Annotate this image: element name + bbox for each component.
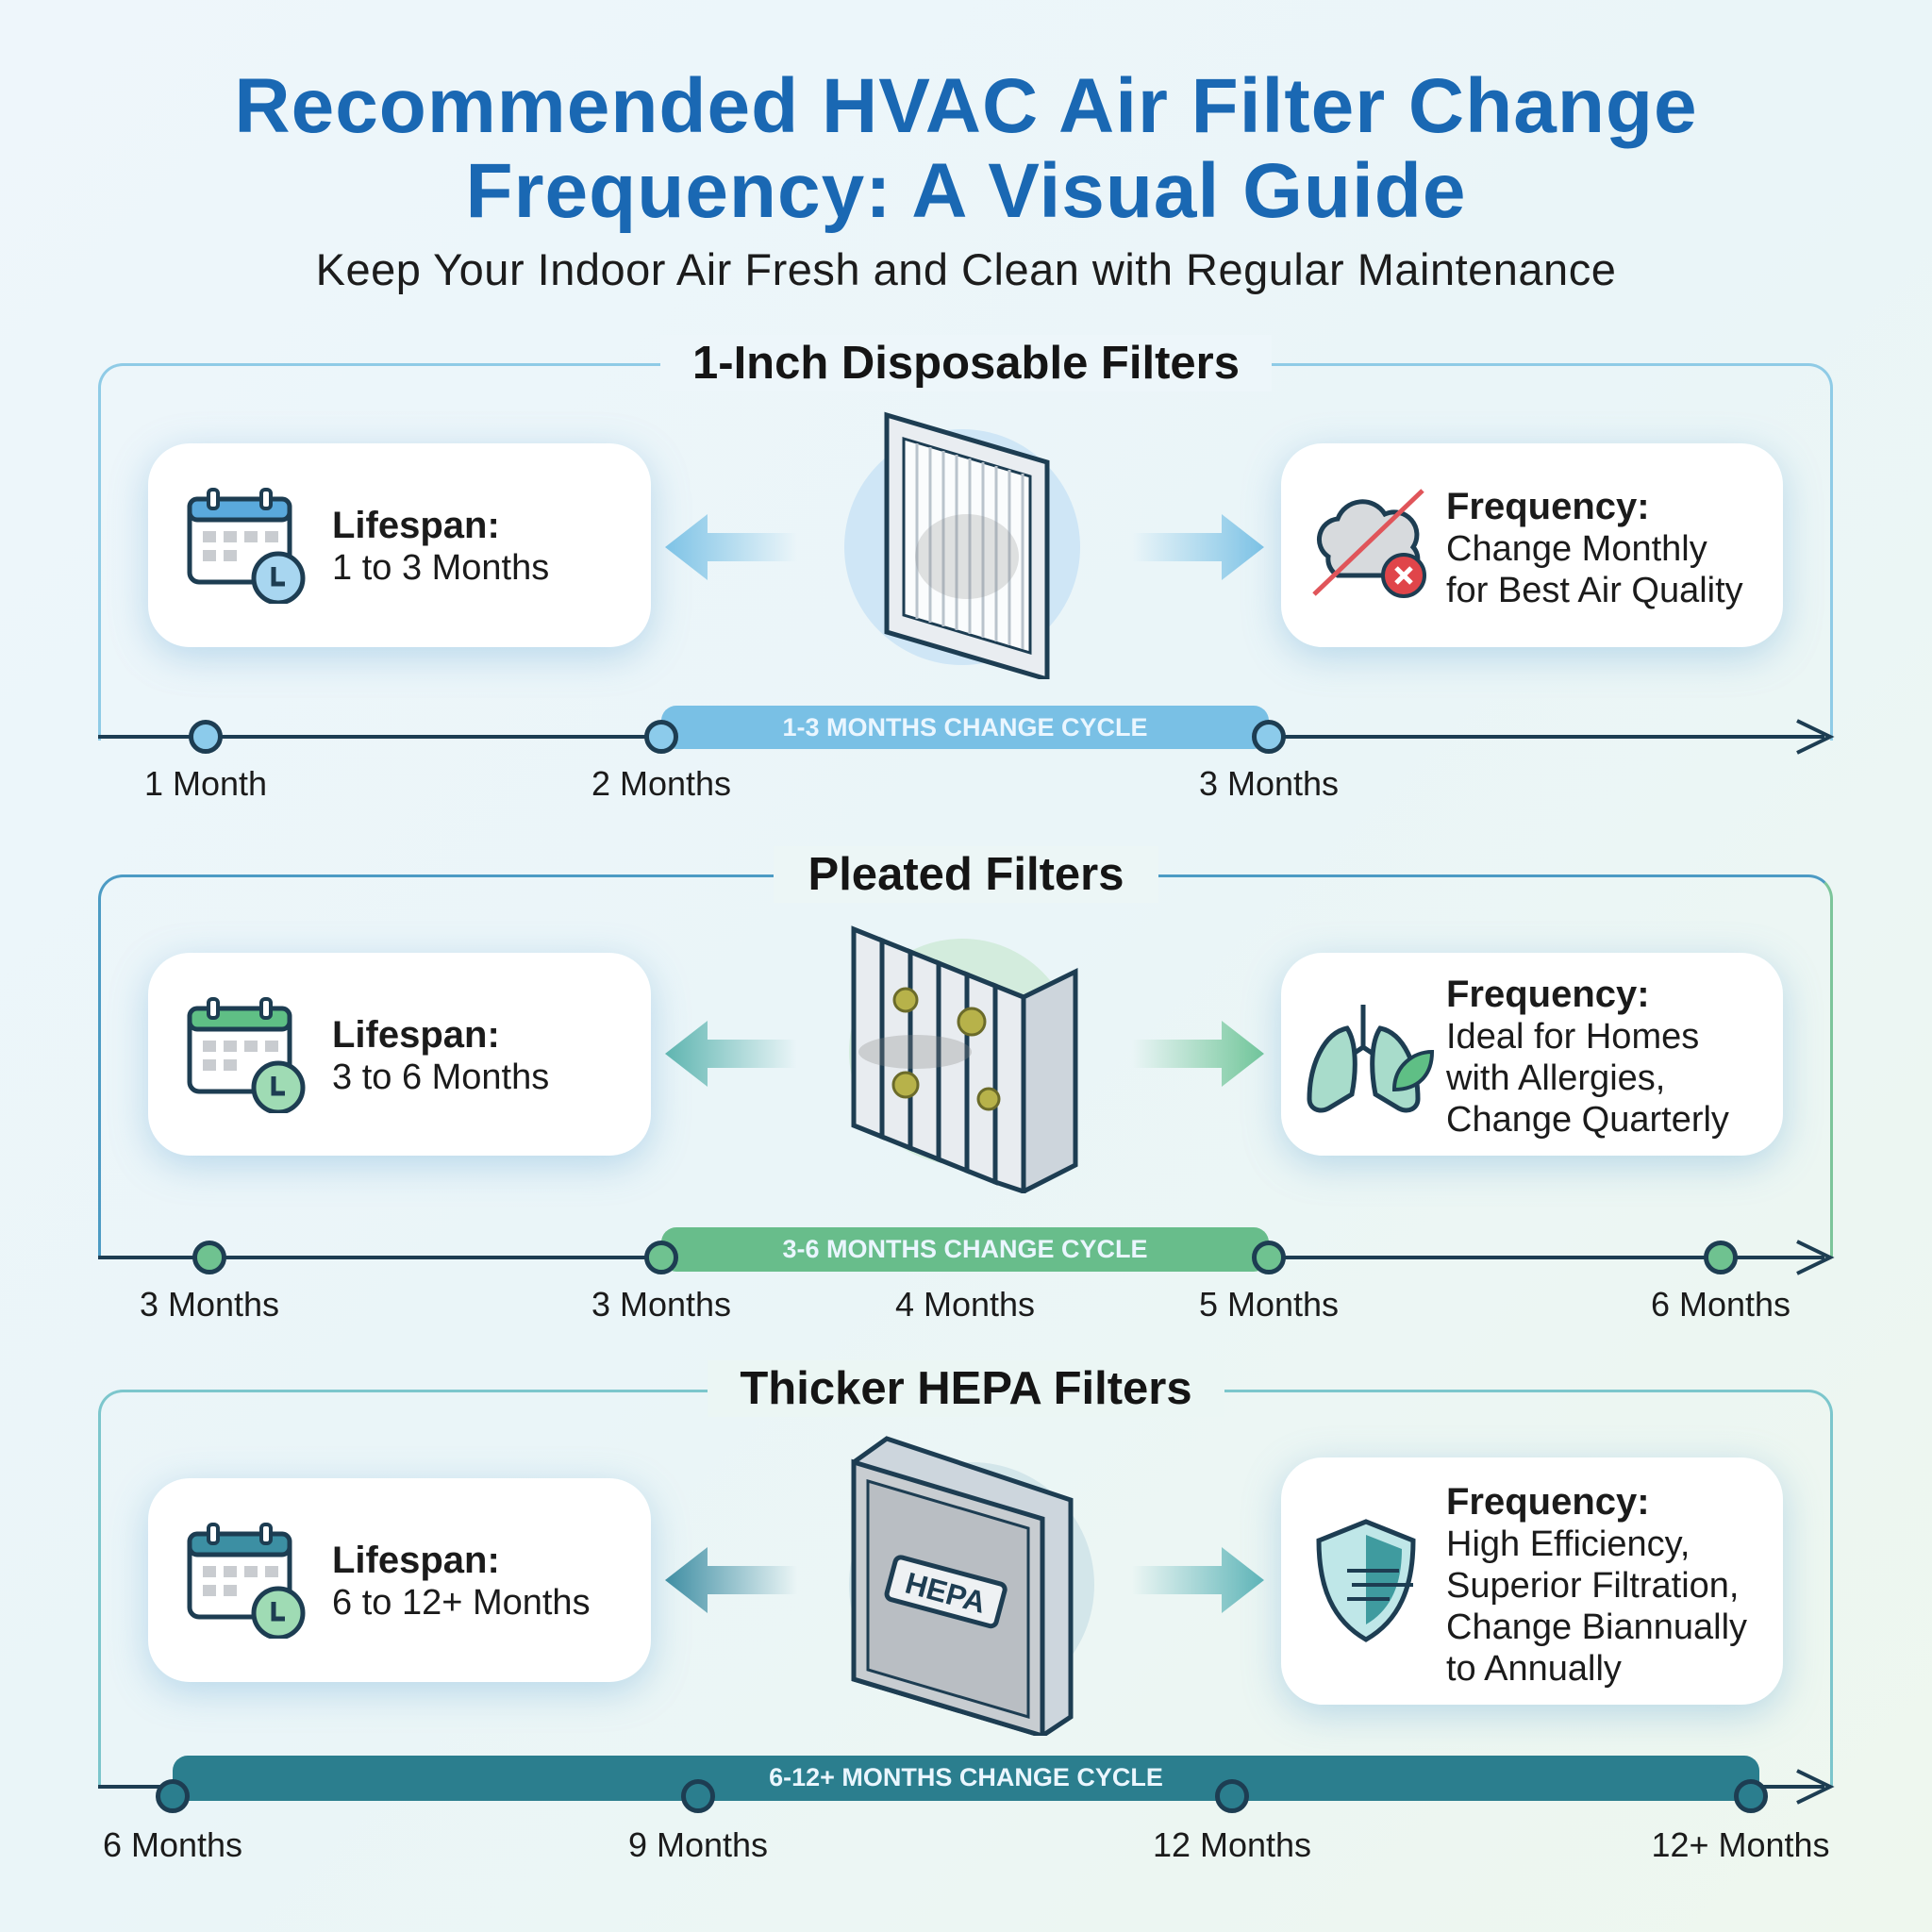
title — [234, 63, 1698, 234]
heading: Thicker HEPA Filters — [740, 1363, 1192, 1414]
change cycle bar: 1-3 MONTHS CHANGE CYCLE — [782, 713, 1148, 741]
arrow left — [665, 1547, 791, 1613]
panel: 1-inch disposable: 2 Months — [591, 764, 731, 803]
change cycle bar: 6-12+ MONTHS CHANGE CYCLE — [769, 1763, 1163, 1791]
change cycle bar — [173, 1756, 1759, 1801]
arrow right — [1140, 1547, 1264, 1613]
arrow right — [1141, 1021, 1264, 1087]
panel: 1-inch disposable — [98, 338, 1834, 803]
card: frequency — [1281, 1457, 1783, 1705]
icon: calendar — [187, 488, 306, 604]
card: lifespan: 3 to 6 Months — [332, 1058, 549, 1097]
card: frequency — [1281, 443, 1783, 647]
card: frequency: High Efficiency, — [1446, 1524, 1690, 1564]
card: lifespan — [148, 1478, 651, 1682]
card: frequency: Frequency: — [1446, 974, 1650, 1015]
arrow left — [665, 514, 787, 580]
panel: pleated: 6 Months — [1651, 1285, 1790, 1324]
card: lifespan: Lifespan: — [332, 1540, 500, 1581]
panel: pleated: 3 Months — [591, 1285, 731, 1324]
arrow left — [665, 1021, 789, 1087]
card: frequency: Change Biannually — [1446, 1607, 1747, 1647]
change cycle bar — [661, 1227, 1269, 1272]
change cycle bar — [661, 706, 1269, 749]
card: frequency: Superior Filtration, — [1446, 1566, 1739, 1606]
panel: 1-inch disposable: 1 Month — [144, 764, 267, 803]
panel: 1-inch disposable: 3 Months — [1199, 764, 1339, 803]
panel: pleated: 5 Months — [1199, 1285, 1339, 1324]
timeline 3 — [98, 1785, 1824, 1789]
card: frequency: to Annually — [1446, 1649, 1622, 1689]
filter image HEPA: HEPA — [902, 1566, 990, 1620]
card: lifespan: 6 to 12+ Months — [332, 1583, 591, 1623]
panel: HEPA: 6 Months — [103, 1825, 242, 1864]
panel: pleated: 3 Months — [140, 1285, 279, 1324]
card: frequency: Ideal for Homes — [1446, 1017, 1699, 1057]
card: frequency — [1281, 953, 1783, 1156]
arrow right — [1142, 514, 1264, 580]
panel: HEPA — [98, 1363, 1834, 1864]
panel: pleated — [98, 849, 1834, 1324]
filter image pleated — [849, 925, 1077, 1193]
card: frequency: Change Quarterly — [1446, 1100, 1729, 1140]
filter image HEPA — [849, 1436, 1094, 1736]
icon: lungs — [1307, 1005, 1434, 1113]
heading: 1-Inch Disposable Filters — [692, 338, 1240, 389]
card: frequency: for Best Air Quality — [1446, 571, 1743, 610]
card: frequency: Change Monthly — [1446, 529, 1707, 569]
icon: no dust — [1312, 489, 1426, 598]
subtitle: Keep Your Indoor Air Fresh and Clean with Regular Maintenance — [316, 244, 1616, 294]
panel: HEPA: 12+ Months — [1651, 1825, 1830, 1864]
filter image — [844, 411, 1080, 679]
card: lifespan — [148, 443, 651, 647]
timeline 2 — [98, 1256, 1824, 1259]
icon: shield — [1317, 1519, 1415, 1642]
title: Recommended HVAC Air Filter Change — [234, 63, 1698, 149]
title: Frequency: A Visual Guide — [466, 148, 1466, 234]
timeline 1 — [98, 735, 1824, 739]
change cycle bar: 3-6 MONTHS CHANGE CYCLE — [782, 1235, 1148, 1263]
panel: pleated: 4 Months — [895, 1285, 1035, 1324]
card: lifespan: 1 to 3 Months — [332, 548, 549, 588]
heading: Pleated Filters — [808, 849, 1124, 900]
card: lifespan — [148, 953, 651, 1156]
panel: HEPA: 9 Months — [628, 1825, 768, 1864]
card: frequency: with Allergies, — [1446, 1058, 1665, 1098]
card: frequency: Frequency: — [1446, 1481, 1650, 1523]
panel: HEPA: 12 Months — [1153, 1825, 1311, 1864]
card: lifespan: Lifespan: — [332, 505, 500, 546]
card: frequency: Frequency: — [1446, 486, 1650, 527]
card: lifespan: Lifespan: — [332, 1014, 500, 1056]
